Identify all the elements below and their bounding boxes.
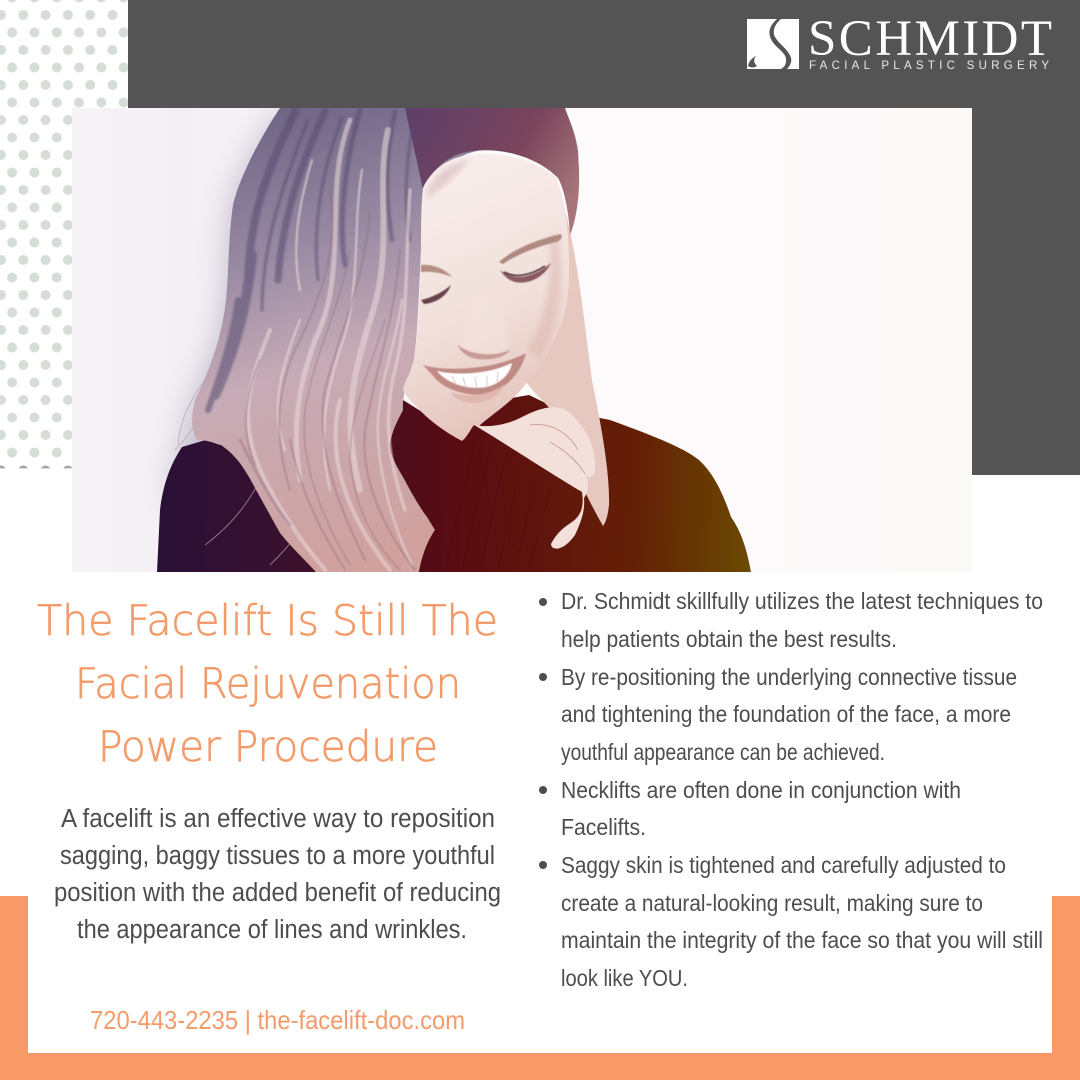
contact line: 720-443-2235 | the-facelift-doc.com <box>90 1005 465 1035</box>
hair behind right <box>525 210 609 526</box>
bullet 3: Necklifts are often done in conjunction with <box>561 777 961 803</box>
bullet 2: By re-positioning the underlying connective tissue <box>561 664 1017 690</box>
cheek shadow <box>528 230 561 360</box>
bullet 2: youthful appearance can be achieved. <box>561 739 885 765</box>
intro paragraph: A facelift is an effective way to reposition <box>61 805 495 833</box>
logo wordmark: SCHMIDT <box>808 11 1052 67</box>
bullet 4: maintain the integrity of the face so that you will still <box>561 927 1043 953</box>
nose shadow <box>458 345 510 359</box>
hair dark fine strands <box>240 190 415 570</box>
photo: smiling woman with duotone <box>72 108 751 572</box>
left eye <box>421 285 451 304</box>
hair mass <box>192 108 578 572</box>
bullet 3 <box>539 777 961 840</box>
lower lip <box>450 384 505 403</box>
hair light strands <box>248 120 412 570</box>
face <box>403 154 569 441</box>
dot pattern panel <box>0 0 128 476</box>
bullet 1: Dr. Schmidt skillfully utilizes the latest techniques to <box>561 588 1043 614</box>
bullet 4: Saggy skin is tightened and carefully adjusted to <box>561 852 1006 878</box>
dark header block <box>128 0 1080 475</box>
bullet 1 <box>539 588 1043 652</box>
nose <box>486 343 504 351</box>
finger lines <box>530 424 585 474</box>
bullet 4: create a natural-looking result, making sure to <box>561 890 983 916</box>
bullet list <box>539 588 1043 991</box>
hand <box>474 407 595 549</box>
intro paragraph <box>54 805 501 944</box>
flyaway wisps <box>175 380 300 565</box>
intro paragraph: sagging, baggy tissues to a more youthful <box>60 842 495 870</box>
sleeve <box>419 425 583 572</box>
heading: The Facelift Is Still The <box>37 596 498 645</box>
forehead shadow <box>425 160 470 200</box>
bullet 1: help patients obtain the best results. <box>561 626 897 652</box>
logo mark <box>747 19 799 69</box>
right eyebrow <box>499 234 562 264</box>
bullet 4 <box>539 852 1043 991</box>
intro paragraph: the appearance of lines and wrinkles. <box>77 916 467 944</box>
heading: Facial Rejuvenation <box>75 659 461 708</box>
logo <box>747 11 1052 72</box>
wall shadow <box>170 108 300 500</box>
intro paragraph: position with the added benefit of reducing <box>54 879 501 907</box>
left eyebrow <box>421 265 452 277</box>
orange frame <box>0 896 1080 1080</box>
bullet 2 <box>539 664 1017 765</box>
smile <box>423 353 526 403</box>
teeth <box>437 363 512 388</box>
bullet 2: and tightening the foundation of the face, a more <box>561 701 1011 727</box>
heading: Power Procedure <box>98 722 438 771</box>
heading <box>37 596 498 771</box>
bullet 4: look like YOU. <box>561 965 688 991</box>
tooth gaps <box>452 372 498 388</box>
smile lips <box>423 353 526 395</box>
hair crown <box>405 108 579 235</box>
bullet 3: Facelifts. <box>561 814 646 840</box>
logo tagline: FACIAL PLASTIC SURGERY <box>809 60 1049 72</box>
right eye <box>500 263 551 283</box>
photo background <box>72 108 418 572</box>
hair shadow strands <box>208 110 412 410</box>
sleeve ribs <box>512 468 550 570</box>
sweater <box>157 395 751 572</box>
